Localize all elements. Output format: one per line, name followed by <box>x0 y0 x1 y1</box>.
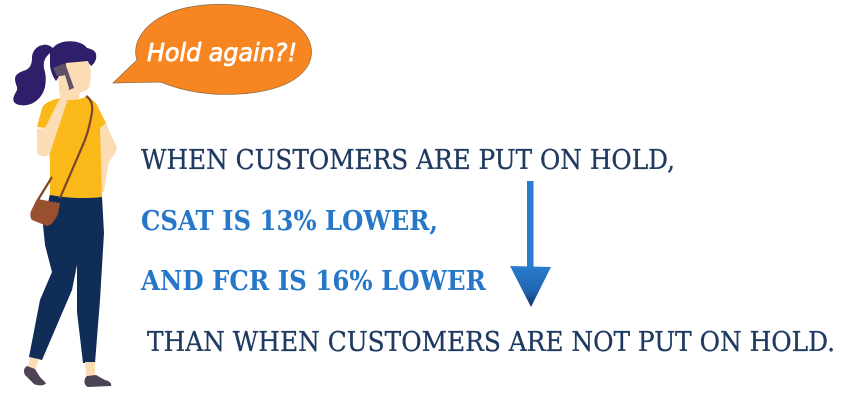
bag strap <box>36 96 92 203</box>
trousers <box>29 194 104 363</box>
bubble text: Hold again?! <box>147 38 297 67</box>
illustration: woman on the phone <box>13 41 117 387</box>
phone <box>53 63 74 90</box>
face and neck <box>64 61 91 101</box>
speech bubble <box>113 5 311 94</box>
left ankle and shoe <box>28 358 39 370</box>
raised arm and hand <box>37 75 69 156</box>
arrow: downward <box>510 181 551 307</box>
text: CSAT lower: CSAT IS 13% LOWER, <box>141 206 438 237</box>
right ankle and shoe <box>85 362 95 377</box>
ponytail and hair <box>13 41 96 105</box>
handbag <box>30 199 60 226</box>
yellow shirt <box>37 96 106 198</box>
text: FCR lower: AND FCR IS 16% LOWER <box>140 266 486 297</box>
bubble shape <box>113 5 311 94</box>
text: when customers are put on hold: WHEN CUSTOMERS ARE PUT ON HOLD, <box>141 145 675 176</box>
right arm <box>98 120 117 192</box>
